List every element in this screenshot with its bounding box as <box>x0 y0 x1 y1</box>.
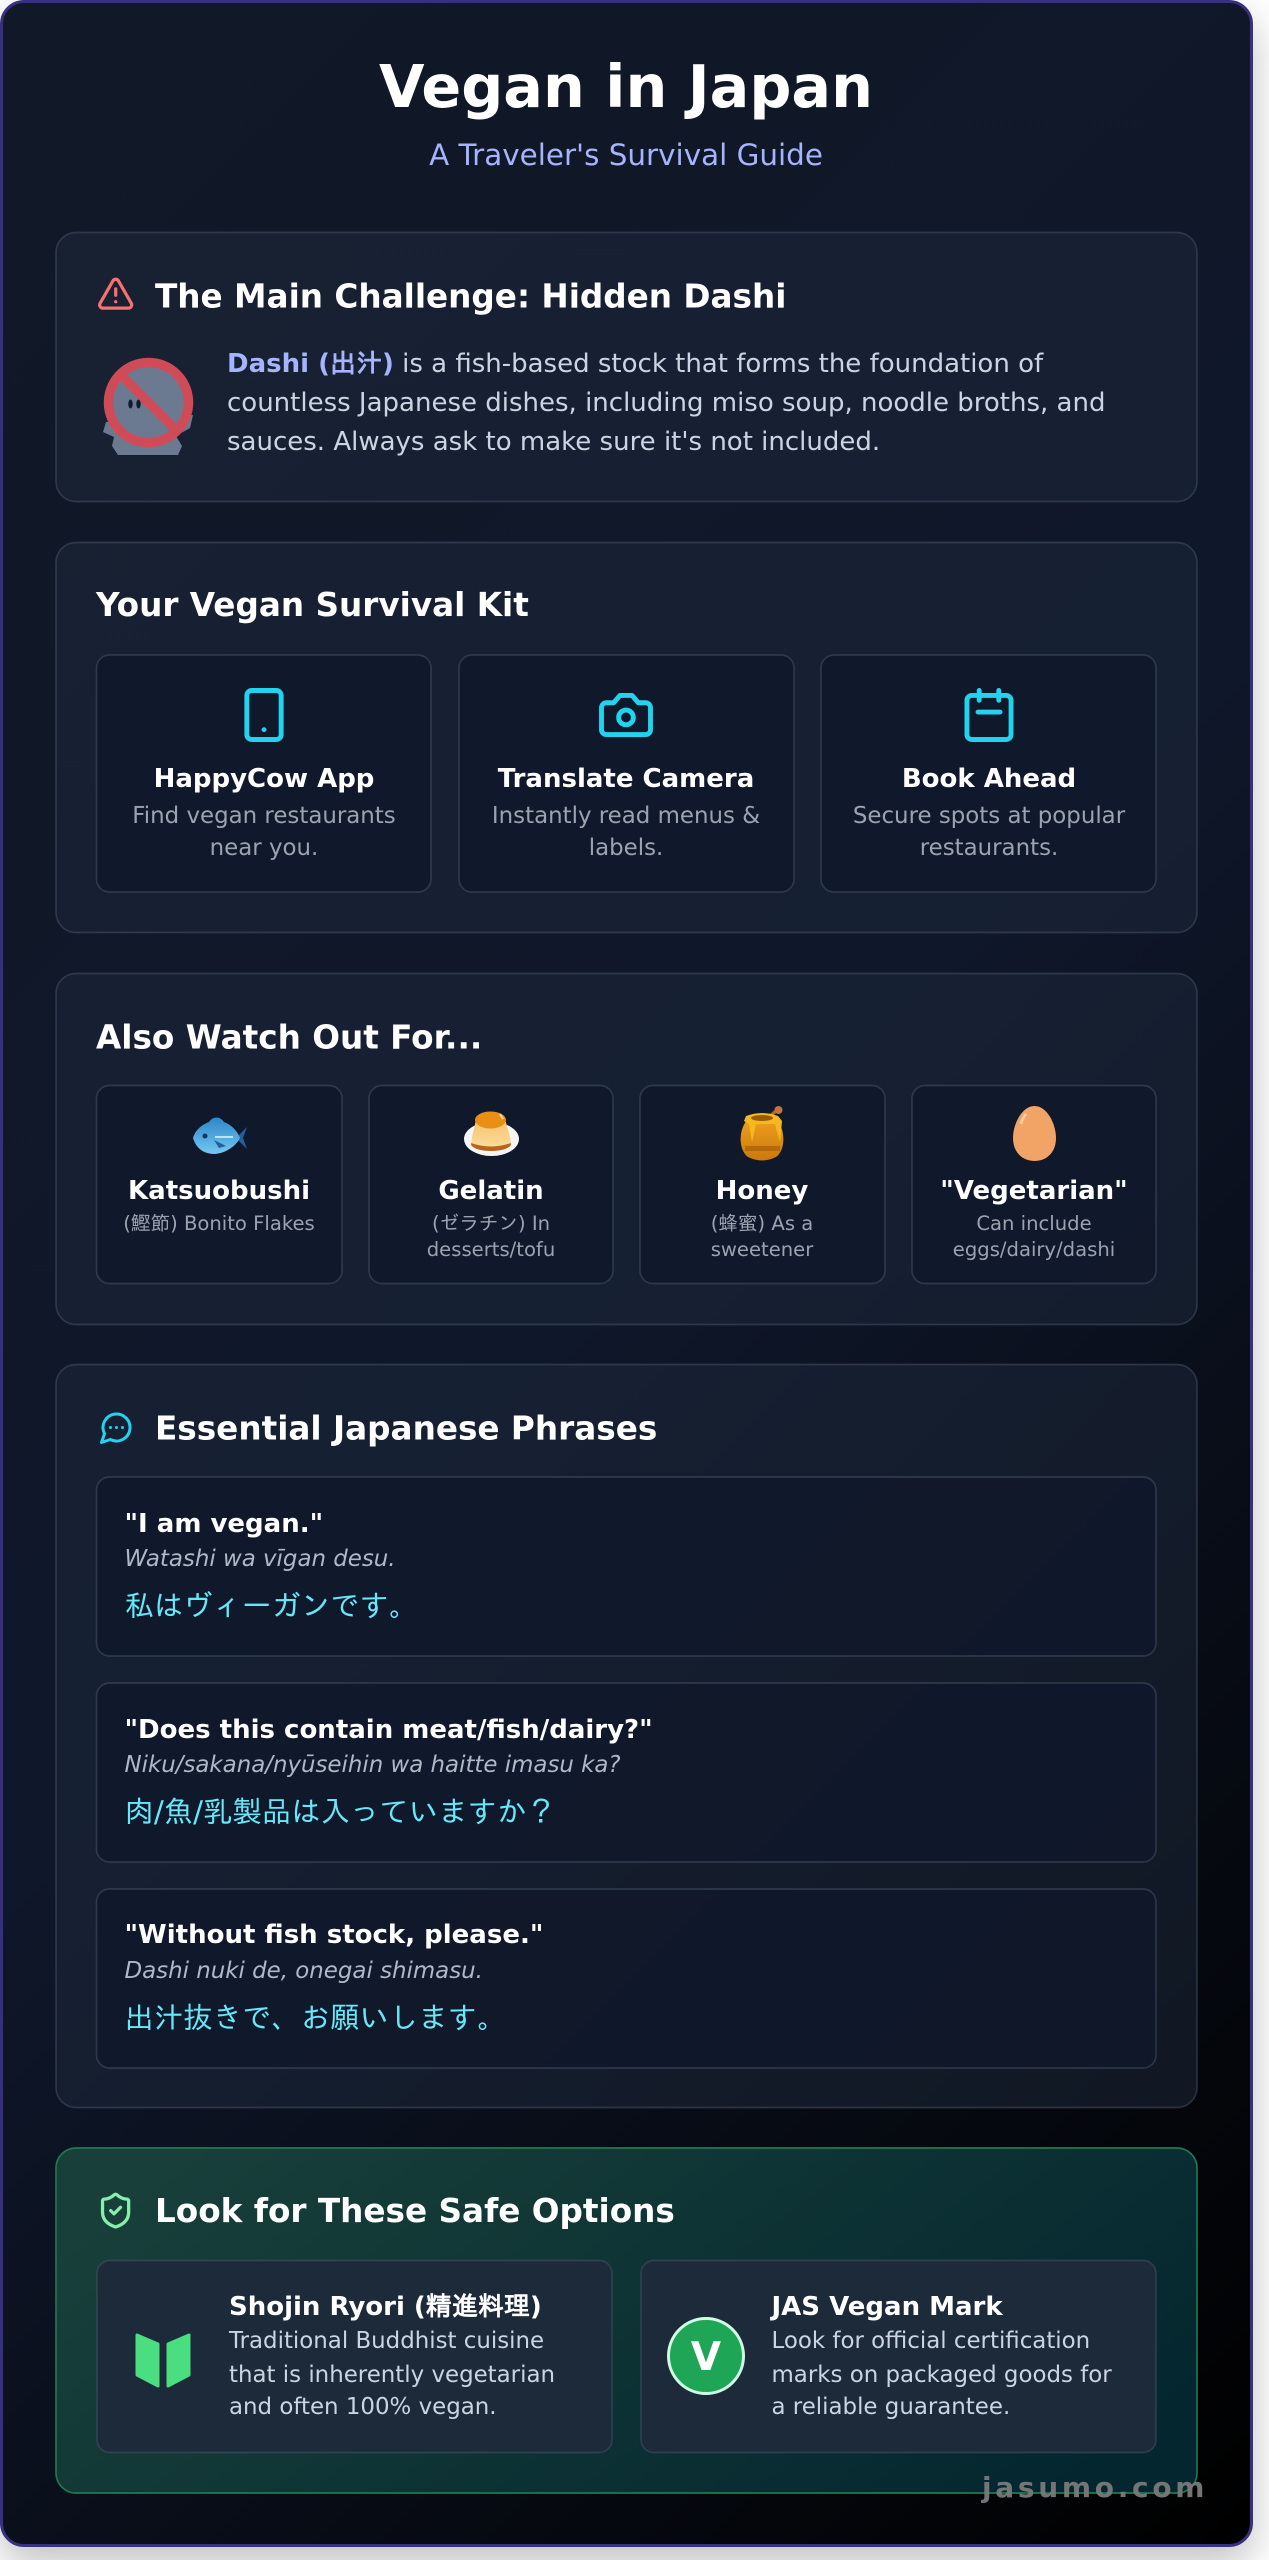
icon: shield check <box>103 2194 129 2227</box>
icon: V badge: V <box>691 2335 721 2380</box>
phrase card: without fish stock: "Without fish stock, please." <box>124 1920 543 1950</box>
card title: Gelatin <box>438 1176 544 1206</box>
icon: honey pot <box>741 1106 783 1160</box>
card description <box>132 803 396 861</box>
card description: Secure spots at popular <box>853 803 1126 829</box>
card title: Katsuobushi <box>128 1176 310 1206</box>
card description: marks on packaged goods for <box>772 2362 1112 2388</box>
icon: calendar <box>967 690 1011 740</box>
card description <box>228 2328 555 2420</box>
heading: phrases: Essential Japanese Phrases <box>155 1410 657 1448</box>
title: Vegan in Japan <box>379 52 873 121</box>
card description: Traditional Buddhist cuisine <box>228 2328 544 2354</box>
phrase card: I am vegan: "I am vegan." <box>124 1509 323 1539</box>
card description: (鰹節) Bonito Flakes <box>123 1212 315 1235</box>
card title: Book Ahead <box>902 764 1076 794</box>
card description: restaurants. <box>920 835 1058 861</box>
icon: prohibited dashi pot <box>103 360 193 455</box>
heading: main challenge: The Main Challenge: Hidden Dashi <box>155 278 786 316</box>
icon: smartphone <box>247 690 281 740</box>
phrase card: contain meat <box>96 1683 1156 1862</box>
card description: (蜂蜜) As a <box>711 1212 813 1235</box>
icon: V badge <box>668 2318 744 2394</box>
card: JAS Vegan Mark <box>641 2260 1156 2452</box>
card: Vegetarian <box>912 1086 1156 1284</box>
text: dashi explanation: countless Japanese dishes, including miso soup, noodle broths, and <box>227 388 1105 418</box>
heading: watch out: Also Watch Out For... <box>96 1018 482 1056</box>
card description <box>711 1212 814 1261</box>
card description: Can include <box>976 1212 1092 1235</box>
card description: near you. <box>210 835 318 861</box>
subtitle: A Traveler's Survival Guide <box>429 138 823 172</box>
phrase card: I am vegan: 私はヴィーガンです。 <box>124 1589 418 1623</box>
phrase card: I am vegan: Watashi wa vīgan desu. <box>124 1546 396 1572</box>
icon: warning triangle <box>100 279 132 308</box>
card: Book Ahead <box>821 655 1156 892</box>
card: Katsuobushi <box>96 1086 342 1284</box>
panel: survival kit <box>56 542 1197 932</box>
card description <box>853 803 1126 861</box>
card: Translate Camera <box>459 655 794 892</box>
card description: a reliable guarantee. <box>772 2394 1010 2420</box>
icon: book <box>137 2335 189 2386</box>
card description <box>427 1212 555 1261</box>
panel: essential phrases <box>56 1364 1197 2108</box>
phrase card: contain meat: Niku/sakana/nyūseihin wa haitte imasu ka? <box>124 1752 621 1778</box>
icon: camera <box>602 695 650 735</box>
card description <box>772 2328 1112 2420</box>
card title: Translate Camera <box>498 764 754 794</box>
watermark: jasumo.com <box>981 2471 1208 2504</box>
card description: Find vegan restaurants <box>132 803 396 829</box>
phrase card: without fish stock: Dashi nuki de, onegai shimasu. <box>124 1958 483 1984</box>
card description: sweetener <box>711 1238 814 1261</box>
icon: speech bubble <box>102 1414 130 1442</box>
card: Shojin Ryori <box>97 2260 612 2452</box>
heading: survival kit: Your Vegan Survival Kit <box>95 586 529 624</box>
card description: Look for official certification <box>772 2328 1090 2354</box>
icon: pudding <box>464 1112 519 1156</box>
icon: egg <box>1013 1106 1056 1161</box>
heading: safe options: Look for These Safe Options <box>155 2192 675 2230</box>
phrase card: contain meat: "Does this contain meat/fish/dairy?" <box>124 1715 653 1745</box>
card description: desserts/tofu <box>427 1238 555 1261</box>
text: dashi explanation <box>227 349 1105 457</box>
panel: safe options <box>56 2148 1197 2493</box>
phrase card: I am vegan <box>96 1477 1156 1656</box>
panel: also watch out for <box>56 974 1197 1324</box>
card description: Instantly read menus & <box>492 803 760 829</box>
card title: Honey <box>716 1176 808 1206</box>
card: HappyCow App <box>96 655 431 892</box>
card description: eggs/dairy/dashi <box>953 1238 1115 1261</box>
card description: and often 100% vegan. <box>229 2394 497 2420</box>
card description <box>492 803 760 861</box>
card description: that is inherently vegetarian <box>229 2362 555 2388</box>
card description: labels. <box>589 835 663 861</box>
phrase card: without fish stock: 出汁抜きで、お願いします。 <box>124 2001 507 2035</box>
card: Honey <box>640 1086 885 1284</box>
text: dashi explanation: sauces. Always ask to make sure it's not included. <box>227 427 880 457</box>
card title: Shojin Ryori (精進料理) <box>229 2292 542 2322</box>
icon: fish <box>193 1118 247 1154</box>
card title: JAS Vegan Mark <box>770 2292 1003 2322</box>
card title: "Vegetarian" <box>940 1176 1128 1206</box>
card: Gelatin <box>369 1086 613 1284</box>
text: dashi explanation: Dashi (出汁) is a fish-based stock that forms the foundation of <box>227 349 1044 379</box>
card title: HappyCow App <box>154 764 374 794</box>
phrase card: contain meat: 肉/魚/乳製品は入っていますか？ <box>124 1795 556 1829</box>
panel: main challenge <box>56 232 1197 502</box>
card description: (ゼラチン) In <box>432 1212 550 1235</box>
phrase card: without fish stock <box>96 1889 1156 2068</box>
card description <box>953 1212 1115 1261</box>
